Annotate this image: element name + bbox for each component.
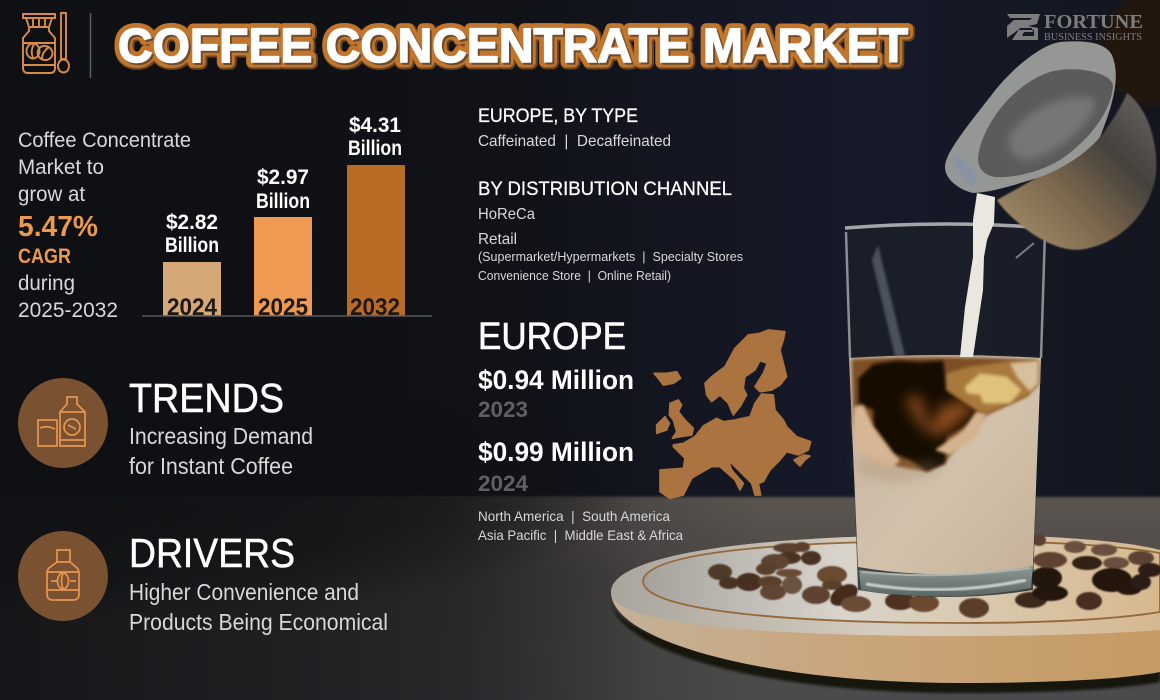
text block: Europe by type xyxy=(478,106,671,150)
panel: trends: for Instant Coffee xyxy=(129,453,293,479)
photo: milk pitcher xyxy=(945,41,1156,357)
photo: coffee beans xyxy=(708,534,1160,618)
logo: Fortune Business Insights: FORTUNE xyxy=(1044,11,1143,33)
bar 2032: 2032 xyxy=(350,294,400,321)
panel: drivers xyxy=(18,530,388,635)
icon: concentrate bottle xyxy=(18,531,108,621)
text: CAGR summary: during xyxy=(18,272,75,295)
text: CAGR summary: Coffee Concentrate xyxy=(18,129,191,152)
header divider xyxy=(90,13,92,78)
text block: by distribution channel xyxy=(478,179,743,283)
logo: Fortune Business Insights xyxy=(1007,11,1143,43)
text block: by distribution channel: Convenience Store | Online Retail) xyxy=(478,268,671,283)
text block: other regions: North America | South America xyxy=(478,508,670,524)
text block: other regions xyxy=(478,508,683,543)
bar 2032: $4.31 xyxy=(349,114,401,137)
photo: glass of iced coffee xyxy=(845,224,1046,597)
title: COFFEE CONCENTRATE MARKET xyxy=(120,22,910,75)
title: COFFEE CONCENTRATE MARKET xyxy=(118,20,908,73)
photo: serving board xyxy=(611,535,1160,693)
text: CAGR summary: 2025-2032 xyxy=(18,299,118,322)
panel: trends: Increasing Demand xyxy=(129,423,313,449)
icon: bottle and glass xyxy=(18,378,108,468)
bar 2025: $2.97 xyxy=(257,166,309,189)
text block: Europe by type: Caffeinated | Decaffeinated xyxy=(478,133,671,150)
bar 2024: $2.82 xyxy=(166,211,218,234)
panel: drivers: Higher Convenience and xyxy=(129,579,359,605)
text: CAGR summary xyxy=(18,129,191,322)
bar 2032 xyxy=(347,114,405,321)
bar 2025: 2025 xyxy=(258,294,308,321)
bar 2025: Billion xyxy=(256,190,310,213)
text block: Europe values: $0.99 Million xyxy=(478,437,634,467)
text block: Europe values: 2024 xyxy=(478,471,529,496)
text block: other regions: Asia Pacific | Middle East & Africa xyxy=(478,527,683,543)
bar 2024: Billion xyxy=(165,234,219,257)
text block: Europe values: EUROPE xyxy=(478,316,626,358)
title: COFFEE CONCENTRATE MARKET xyxy=(118,20,908,73)
bar 2025 xyxy=(254,166,312,321)
text: CAGR summary: Market to xyxy=(18,156,104,179)
panel: drivers: Products Being Economical xyxy=(129,609,388,635)
text: CAGR summary: CAGR xyxy=(18,245,71,268)
text block: by distribution channel: BY DISTRIBUTION CHANNEL xyxy=(478,179,732,200)
logo: Fortune Business Insights: BUSINESS INSIGHTS xyxy=(1044,31,1142,43)
text block: Europe by type: EUROPE, BY TYPE xyxy=(478,106,638,127)
panel: trends xyxy=(18,375,313,479)
panel: drivers: DRIVERS xyxy=(129,530,295,576)
bar 2032: Billion xyxy=(348,137,402,160)
text block: by distribution channel: (Supermarket/Hypermarkets | Specialty Stores xyxy=(478,249,743,264)
text block: by distribution channel: Retail xyxy=(478,231,517,248)
map: Europe xyxy=(654,330,811,498)
text block: Europe values xyxy=(478,316,634,496)
text block: by distribution channel: HoReCa xyxy=(478,206,535,223)
panel: trends: TRENDS xyxy=(129,375,284,421)
bar chart: market size xyxy=(142,114,432,321)
text block: Europe values: $0.94 Million xyxy=(478,365,634,395)
text block: Europe values: 2023 xyxy=(478,397,528,422)
bar 2024 xyxy=(163,211,221,321)
text: CAGR summary: 5.47% xyxy=(18,211,98,243)
icon: coffee jar and spoon xyxy=(23,13,69,73)
bar 2024: 2024 xyxy=(167,294,218,321)
title: COFFEE CONCENTRATE MARKET xyxy=(119,21,909,74)
text: CAGR summary: grow at xyxy=(18,183,85,206)
